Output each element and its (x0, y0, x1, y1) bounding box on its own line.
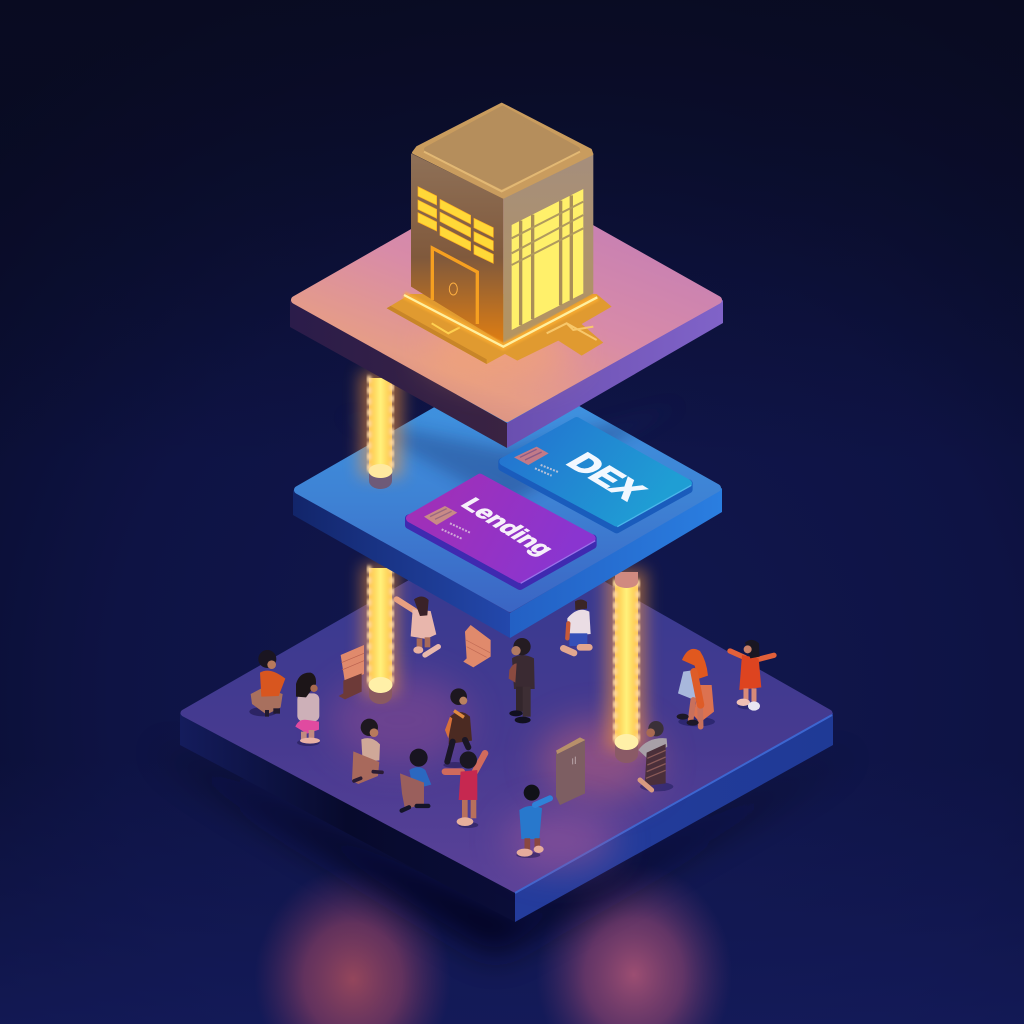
right wall windows (512, 189, 583, 330)
woman in orange dress with open arms (730, 640, 774, 711)
shadow under top platform (340, 405, 680, 505)
platform top face (298, 370, 717, 608)
base glow line (404, 295, 597, 347)
person behind tall brick stack (638, 721, 673, 791)
peach brick stack centre (463, 625, 491, 667)
lower right glowing pillar (606, 570, 646, 763)
platform right side (507, 300, 723, 448)
lower left glowing pillar (362, 565, 398, 704)
card: DEX (502, 421, 691, 529)
panel: top building platform (290, 180, 723, 448)
figures: right group (509, 599, 774, 858)
person in white shirt and blue shorts (563, 599, 591, 653)
figures: left group (249, 596, 491, 828)
platform right side (510, 488, 722, 638)
left wall windows (418, 187, 493, 263)
person in red dress with raised arms (445, 751, 485, 828)
roof (413, 104, 592, 197)
platform top face (184, 529, 829, 889)
peach brick stack left (339, 645, 364, 699)
platform right side (515, 713, 833, 922)
person reaching near pillar (397, 596, 438, 655)
Lending label: Lending (455, 495, 559, 559)
panel: middle protocol platform (293, 370, 722, 638)
DEX label: DEX (558, 448, 654, 505)
card chip icon (514, 447, 559, 476)
person in blue (516, 785, 550, 858)
platform left side (293, 490, 510, 638)
icon: glowing bank building (387, 104, 612, 364)
person seated on bricks (249, 650, 285, 717)
upper glowing pillar (360, 372, 402, 489)
woman with orange hair (677, 649, 715, 727)
building base plate (387, 294, 612, 364)
door (432, 248, 477, 324)
platform left side (180, 713, 515, 922)
platform left side (290, 300, 507, 448)
person in blue with bricks (400, 749, 431, 811)
card: Lending (409, 478, 595, 586)
girl in pink skirt (295, 673, 320, 746)
card chip icon (424, 506, 470, 539)
person in patterned jacket (443, 688, 472, 768)
monolith sign (556, 737, 585, 805)
platform top face (295, 180, 718, 418)
person behind bricks (352, 719, 382, 784)
protocol cards (409, 421, 691, 586)
man in dark suit (509, 638, 535, 723)
panel: bottom community platform (180, 529, 833, 922)
left wall (411, 153, 503, 343)
right wall (503, 153, 593, 343)
